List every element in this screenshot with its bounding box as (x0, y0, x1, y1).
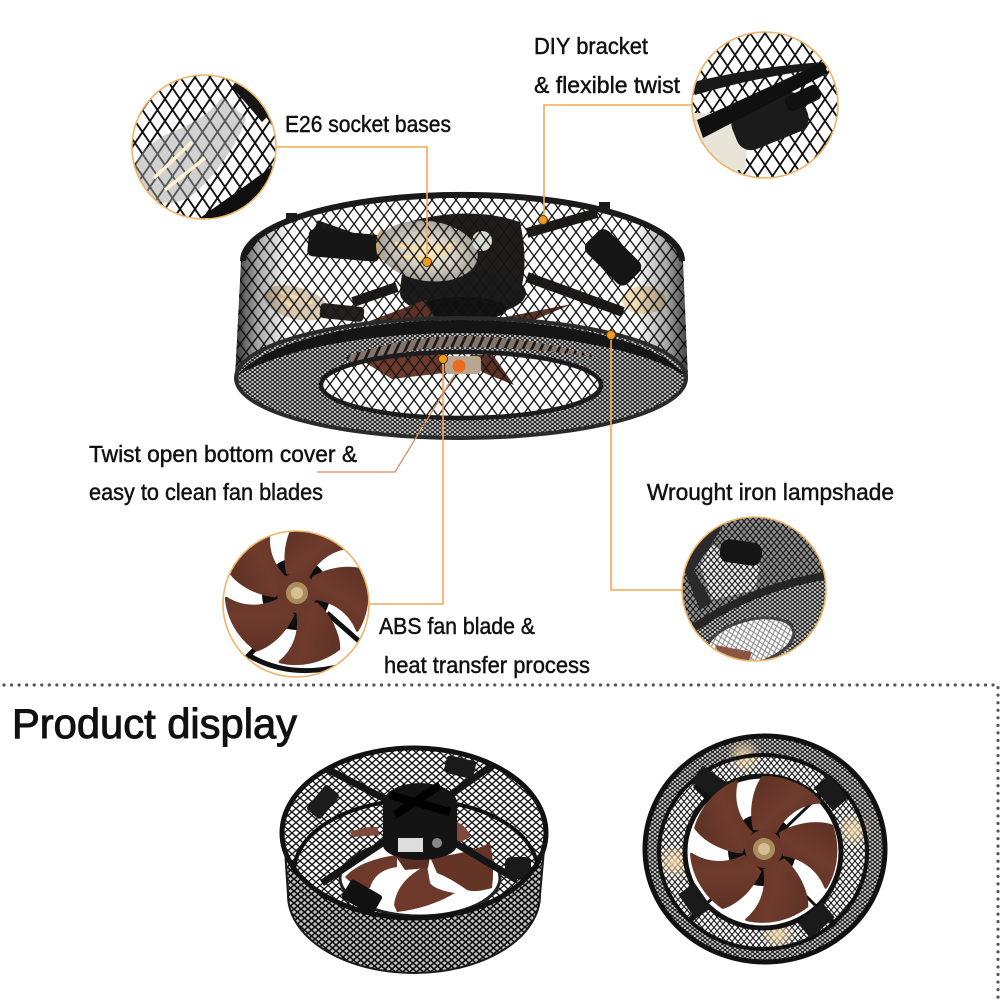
main ceiling fan illustration (235, 190, 690, 438)
inset: E26 socket bulb (130, 73, 280, 223)
inset: ABS fan blade (222, 530, 370, 678)
label: DIY bracket: DIY bracket (534, 33, 649, 59)
inset: DIY bracket (690, 30, 840, 180)
label: twist open bottom cover: Twist open bottom cover & (89, 441, 357, 467)
leader lines and anchor dots (277, 105, 693, 604)
product view: bottom side (645, 736, 885, 962)
cage mesh wall (235, 190, 690, 380)
label: wrought iron lampshade: Wrought iron lampshade (647, 479, 894, 505)
dark upper rim band (237, 320, 685, 376)
label: easy to clean fan blades: easy to clean fan blades (89, 479, 323, 505)
product view: top side (275, 745, 555, 980)
upper ring see-through region (345, 336, 600, 370)
dotted divider (4, 685, 998, 1000)
heading: product display: Product display (12, 700, 297, 747)
label: flexible twist: & flexible twist (534, 72, 681, 98)
product inner view (284, 750, 544, 916)
bottom outer rim (236, 318, 686, 438)
lower cage wall (286, 859, 542, 972)
bottom cover ring with dense mesh (235, 318, 687, 438)
center opening with blades (320, 350, 605, 422)
label: heat transfer process: heat transfer process (384, 652, 590, 678)
top rim (243, 195, 682, 261)
label: E26 socket bases: E26 socket bases (285, 111, 451, 137)
fan interior: sockets, bulbs, motor and brackets (264, 210, 666, 322)
label: ABS fan blade: ABS fan blade & (379, 613, 535, 639)
inset: wrought iron lampshade (681, 516, 827, 662)
mounting knobs (286, 202, 610, 220)
